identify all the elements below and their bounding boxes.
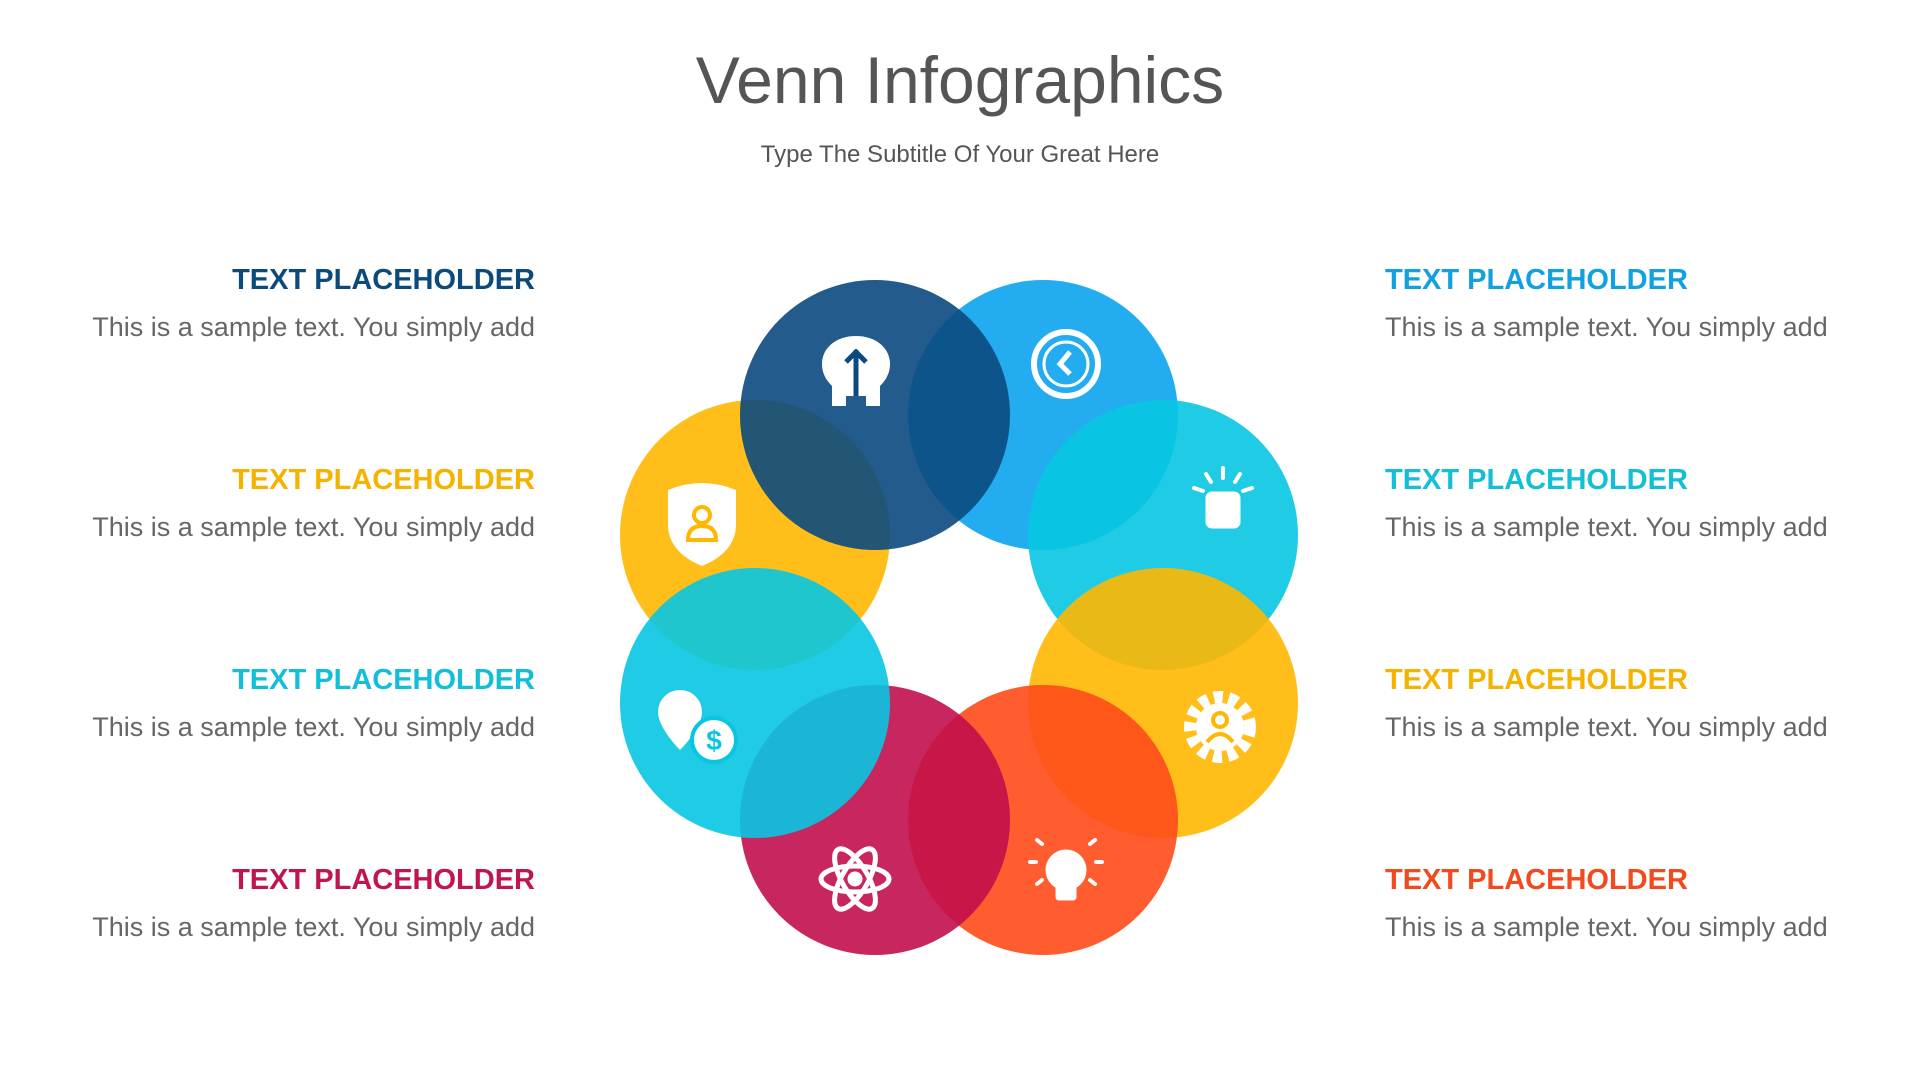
- icon: location dollar: $: [706, 725, 722, 756]
- left text block 1: [92, 264, 535, 342]
- icon: shield: [668, 483, 736, 566]
- right text block 4: This is a sample text. You simply add: [1385, 912, 1828, 942]
- left text block 1: TEXT PLACEHOLDER: [232, 264, 535, 296]
- right text block 1: TEXT PLACEHOLDER: [1385, 264, 1688, 296]
- right text block 2: [1385, 464, 1828, 542]
- right text block 3: This is a sample text. You simply add: [1385, 712, 1828, 742]
- right text block 2: TEXT PLACEHOLDER: [1385, 464, 1688, 496]
- right text block 2: This is a sample text. You simply add: [1385, 512, 1828, 542]
- right text block 1: This is a sample text. You simply add: [1385, 312, 1828, 342]
- icon: light bulb: [1030, 840, 1102, 900]
- icon: fist: [1194, 468, 1252, 528]
- right text block 3: [1385, 664, 1828, 742]
- icon: clock: [1034, 332, 1098, 396]
- left text block 3: TEXT PLACEHOLDER: [232, 664, 535, 696]
- right text block 4: TEXT PLACEHOLDER: [1385, 864, 1688, 896]
- left text block 3: This is a sample text. You simply add: [92, 712, 535, 742]
- left text block 2: [92, 464, 535, 542]
- left text block 4: TEXT PLACEHOLDER: [232, 864, 535, 896]
- left text block 1: This is a sample text. You simply add: [92, 312, 535, 342]
- icon: atom: [821, 843, 889, 915]
- icon: gear person: [1190, 697, 1250, 757]
- left text block 4: [92, 864, 535, 942]
- icon: location dollar: [658, 690, 736, 762]
- title: Venn Infographics: [696, 43, 1224, 117]
- left text block 2: This is a sample text. You simply add: [92, 512, 535, 542]
- left text block 3: [92, 664, 535, 742]
- subtitle: Type The Subtitle Of Your Great Here: [761, 141, 1159, 168]
- left text block 2: TEXT PLACEHOLDER: [232, 464, 535, 496]
- right text block 3: TEXT PLACEHOLDER: [1385, 664, 1688, 696]
- icon: brain: [822, 336, 890, 406]
- left text block 4: This is a sample text. You simply add: [92, 912, 535, 942]
- right text block 4: [1385, 864, 1828, 942]
- right text block 1: [1385, 264, 1828, 342]
